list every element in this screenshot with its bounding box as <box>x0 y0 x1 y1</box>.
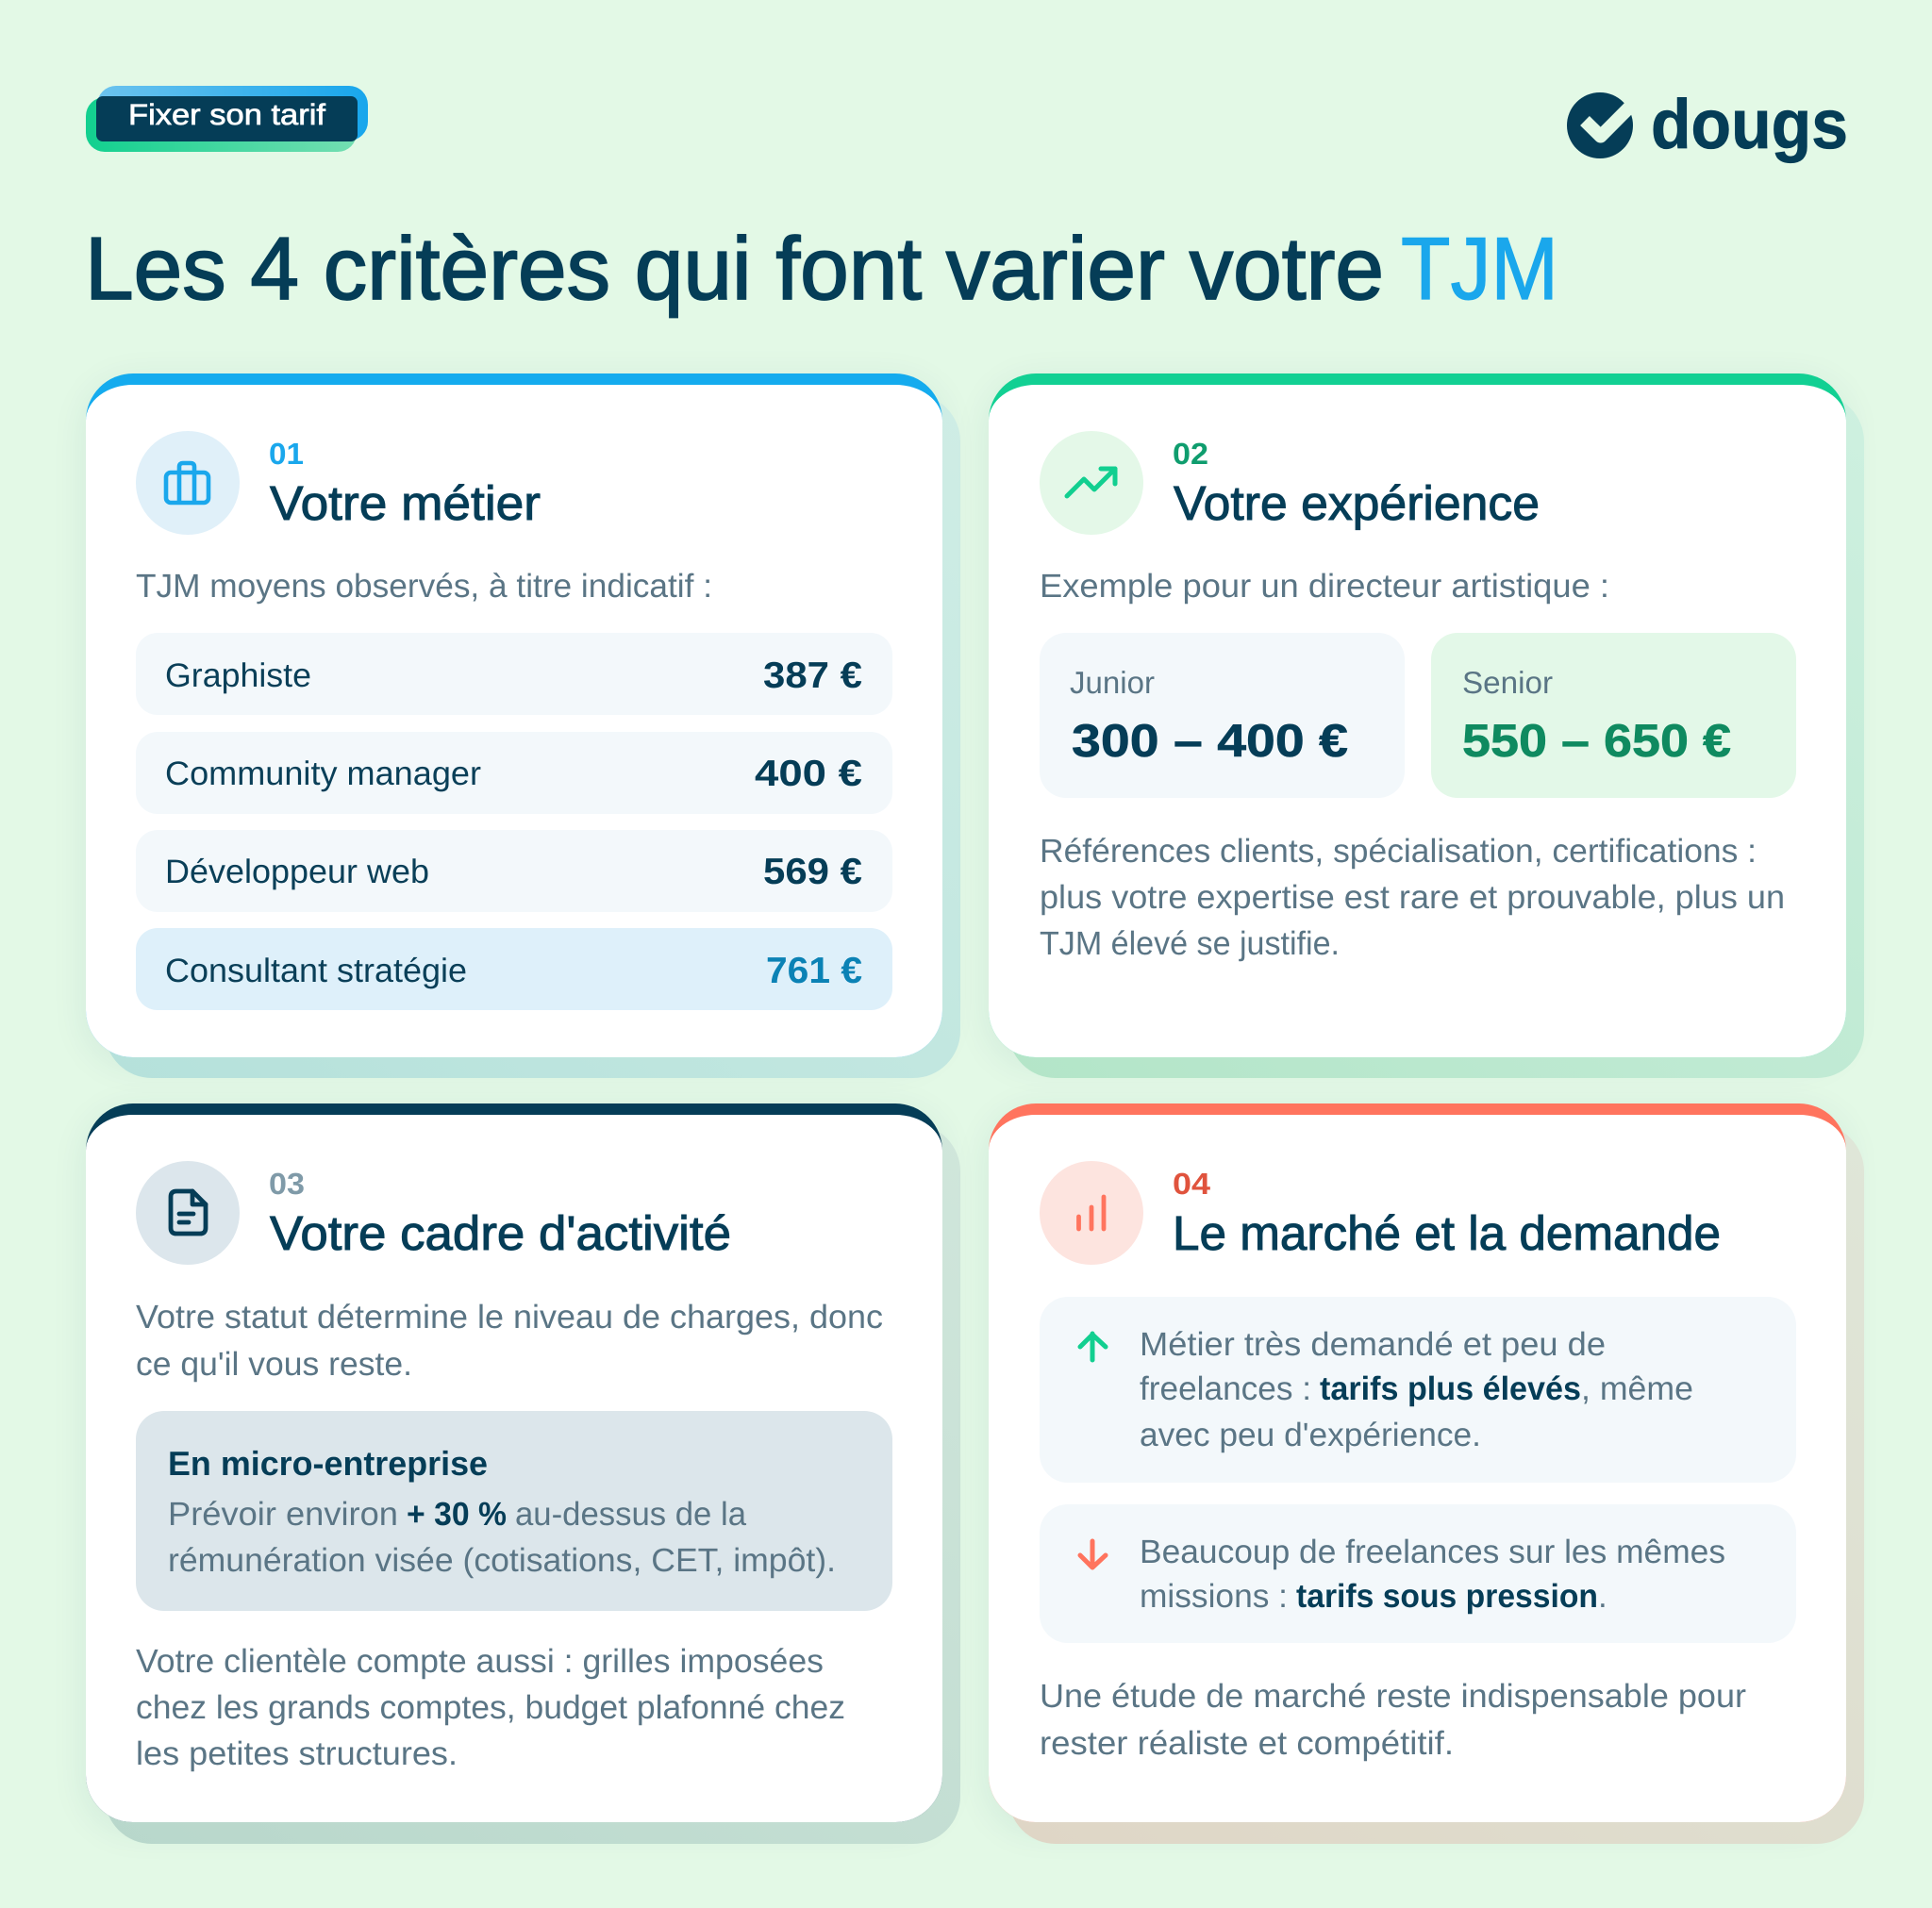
tag: Fixer son tarif <box>86 86 368 152</box>
title: TJM <box>1401 219 1558 318</box>
box: Senior: Senior <box>1462 665 1553 700</box>
row: Graphiste: 387 € <box>763 655 862 696</box>
row: Consultant stratégie <box>136 928 892 1010</box>
number: 04 <box>1173 1167 1210 1201</box>
heading: Votre expérience <box>1174 476 1540 530</box>
callout: En micro-entreprise: + 30 % <box>407 1496 507 1533</box>
callout: En micro-entreprise <box>136 1411 892 1611</box>
row: Consultant stratégie: 761 € <box>766 951 862 991</box>
paragraph <box>1040 1678 1746 1762</box>
row: Community manager <box>136 732 892 814</box>
paragraph: Références clients, spécialisation, certifications : <box>1040 833 1757 870</box>
row: Graphiste: Graphiste <box>165 656 311 694</box>
box: high demand: freelances : <box>1140 1370 1311 1407</box>
row: Développeur web: Développeur web <box>165 853 429 890</box>
row: Community manager: Community manager <box>165 755 481 792</box>
box: Junior <box>1040 633 1405 798</box>
heading: Le marché et la demande <box>1173 1206 1721 1260</box>
intro text: Votre statut détermine le niveau de charges, donc <box>136 1299 883 1336</box>
box: high demand: avec peu d'expérience. <box>1140 1417 1481 1453</box>
box: many freelancers: tarifs sous pression <box>1296 1578 1598 1615</box>
heading: Votre métier <box>270 476 541 530</box>
paragraph: Votre clientèle compte aussi : grilles imposées <box>136 1643 824 1680</box>
icon: document <box>136 1161 240 1265</box>
logo: dougs <box>1567 85 1848 163</box>
intro text: TJM moyens observés, à titre indicatif : <box>136 568 712 605</box>
panel: 04 Le marché et la demande <box>989 1103 1864 1844</box>
icon: logo check <box>1567 92 1640 158</box>
row: Community manager: 400 € <box>755 754 862 794</box>
icon: briefcase <box>136 431 240 535</box>
box: Junior: 300 – 400 € <box>1072 716 1348 767</box>
row: Consultant stratégie: Consultant stratégie <box>165 952 467 989</box>
intro text: ce qu'il vous reste. <box>136 1346 412 1383</box>
number: 01 <box>269 437 304 471</box>
row: Développeur web <box>136 830 892 912</box>
number: 03 <box>269 1167 305 1201</box>
callout: En micro-entreprise: rémunération visée (cotisations, CET, impôt). <box>168 1542 836 1579</box>
icon: arrow up <box>1080 1334 1106 1360</box>
box: Senior <box>1431 633 1796 798</box>
number: 02 <box>1173 437 1208 471</box>
panel: 02 Votre expérience <box>989 373 1864 1078</box>
title: Les 4 critères qui font varier votre <box>85 219 1384 318</box>
box: high demand <box>1040 1297 1796 1483</box>
paragraph: plus votre expertise est rare et prouvable, plus un <box>1040 879 1785 916</box>
callout: En micro-entreprise: au-dessus de la <box>515 1496 747 1533</box>
box: Senior: 550 – 650 € <box>1462 716 1731 767</box>
box: many freelancers: Beaucoup de freelances sur les mêmes <box>1140 1534 1725 1570</box>
icon: arrow down <box>1080 1541 1106 1568</box>
box: many freelancers <box>1040 1504 1796 1643</box>
box: high demand: Métier très demandé et peu de <box>1140 1326 1606 1363</box>
logo: dougs: dougs <box>1651 85 1848 163</box>
paragraph <box>136 1643 845 1772</box>
box: many freelancers: missions : <box>1140 1578 1288 1615</box>
paragraph: les petites structures. <box>136 1735 458 1772</box>
tag: Fixer son tarif: Fixer son tarif <box>128 98 325 131</box>
intro text: Exemple pour un directeur artistique : <box>1040 568 1609 605</box>
callout: En micro-entreprise: En micro-entreprise <box>168 1444 488 1483</box>
row: Développeur web: 569 € <box>763 852 862 892</box>
paragraph: Une étude de marché reste indispensable pour <box>1040 1678 1746 1715</box>
box: high demand: , même <box>1581 1370 1693 1407</box>
heading: Votre cadre d'activité <box>270 1206 731 1260</box>
icon: trend arrow <box>1040 431 1143 535</box>
intro text <box>136 1299 883 1383</box>
paragraph: TJM élevé se justifie. <box>1040 925 1340 962</box>
paragraph: rester réaliste et compétitif. <box>1040 1725 1454 1762</box>
box: high demand: tarifs plus élevés <box>1320 1370 1581 1407</box>
row: Graphiste <box>136 633 892 715</box>
paragraph: chez les grands comptes, budget plafonné chez <box>136 1689 845 1726</box>
box: Junior: Junior <box>1070 665 1155 700</box>
panel: 03 Votre cadre d'activité <box>86 1103 960 1844</box>
callout: En micro-entreprise: Prévoir environ <box>168 1496 398 1533</box>
panel: 01 Votre métier <box>86 373 960 1078</box>
box: many freelancers: . <box>1598 1578 1607 1615</box>
icon: bars <box>1040 1161 1143 1265</box>
paragraph <box>1040 833 1785 962</box>
